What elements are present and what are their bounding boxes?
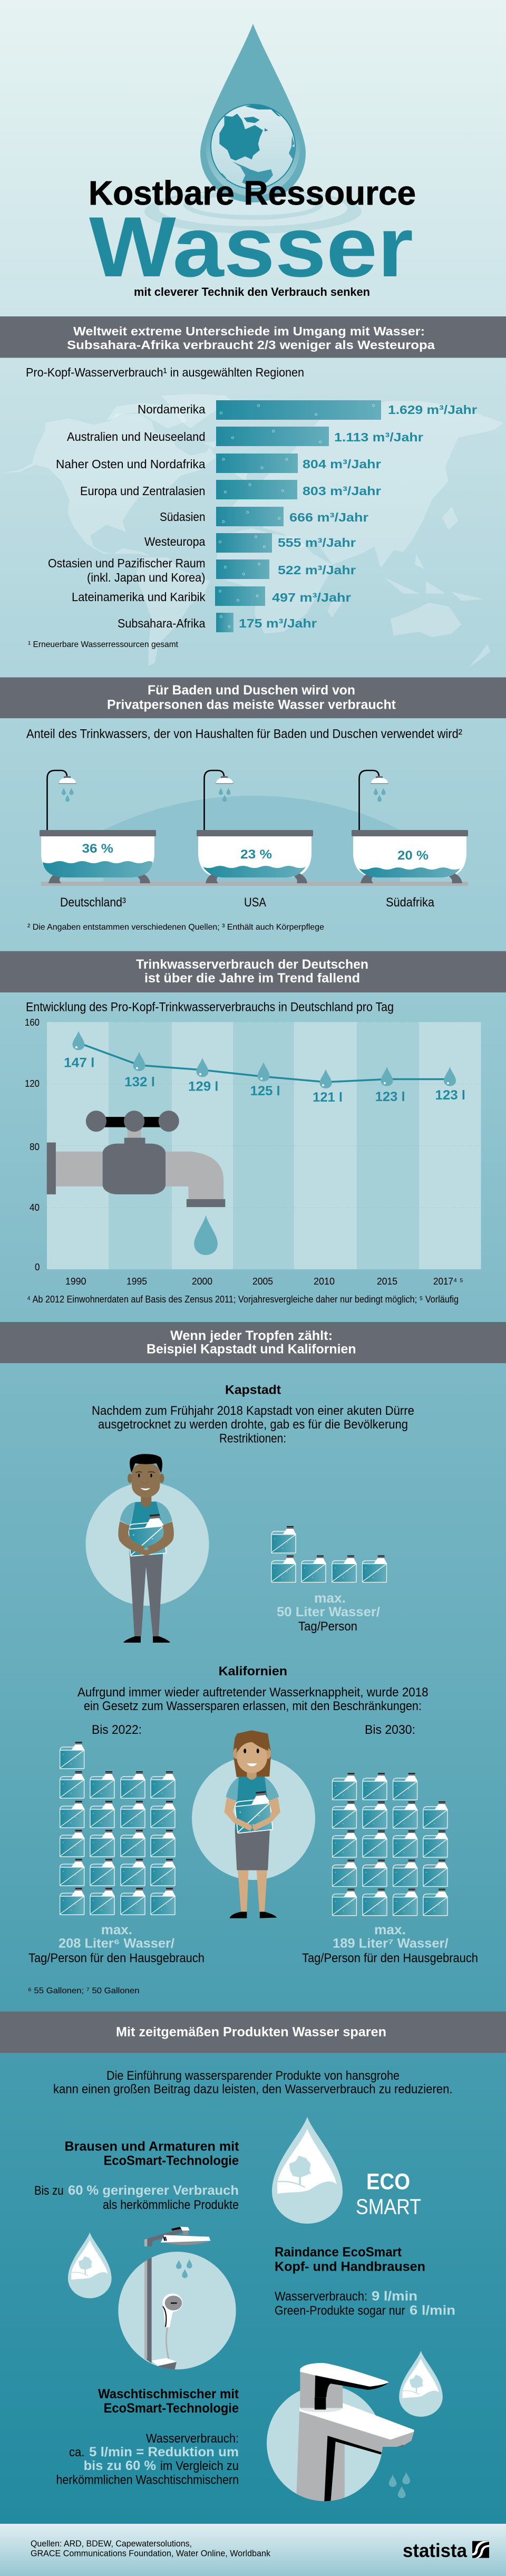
text block: 208 Liter limit: [28, 1922, 205, 1965]
bar: Australien und Neuseeland: [67, 427, 423, 446]
tub: Deutschland 36 %: 36 %: [82, 842, 113, 856]
x axis labels: 2010: [314, 1276, 335, 1287]
y axis labels: 120: [25, 1078, 40, 1089]
text block: Brausen und Armaturen: EcoSmart-Technologie: [104, 2154, 239, 2168]
panel: per capita water use by region: [0, 365, 503, 668]
data values: 121 l: [313, 1090, 343, 1105]
text block: Brausen und Armaturen: Brausen und Armaturen mit: [64, 2139, 239, 2154]
bar: Lateinamerika und Karibik: [72, 586, 351, 606]
data drops: [73, 1031, 456, 1088]
text block: Waschtischmischer: herkömmlichen Waschtischmischern: [56, 2473, 239, 2487]
text block: Kapstadt intro: Restriktionen:: [219, 1431, 286, 1446]
bar: Ostasien und Pazifischer Raum: 522 m³/Jahr: [278, 563, 356, 577]
x axis labels: 2017⁴ ⁵: [433, 1276, 463, 1287]
bar: Ostasien und Pazifischer Raum: Ostasien und Pazifischer Raum: [48, 556, 206, 570]
data line: [79, 1043, 450, 1082]
subtitle: mit cleverer Technik den Verbrauch senken: [134, 285, 370, 298]
tub: USA 23 %: 23 %: [240, 847, 272, 862]
text block: Waschtischmischer: bis zu 60 %: [84, 2458, 156, 2473]
icon: washbasin mixer: [267, 2363, 414, 2502]
icon: third EcoSmart drop: [399, 2351, 443, 2417]
text block: Brausen und Armaturen: [34, 2139, 239, 2212]
heading bar: German consumption trend: [0, 951, 506, 992]
bar: Südasien: Südasien: [160, 510, 206, 524]
text block: Raindance EcoSmart: 6 l/min: [410, 2303, 455, 2318]
country labels: Deutschland³: [60, 895, 126, 910]
heading bar: modern products: Mit zeitgemäßen Produkten Wasser sparen: [116, 2025, 386, 2040]
text block: Waschtischmischer: Waschtischmischer mit: [98, 2387, 239, 2401]
text block: Raindance EcoSmart: 9 l/min: [372, 2289, 417, 2304]
logo text: ECO SMART: SMART: [356, 2195, 421, 2219]
data values: 125 l: [250, 1084, 280, 1098]
text block: products intro: [53, 2069, 452, 2097]
text block: products intro: kann einen großen Beitrag dazu leisten, den Wasserverbrauch zu reduzieren.: [53, 2082, 452, 2097]
icon: 21 water canisters until 2022: [60, 1742, 176, 1915]
tub: Deutschland 36 %: [40, 770, 156, 883]
heading bar: bathing and showering: Privatpersonen das meiste Wasser verbraucht: [107, 697, 396, 712]
heading bar: every drop counts: [0, 1322, 506, 1363]
bar: Westeuropa: Westeuropa: [144, 535, 206, 548]
y axis labels: 160: [25, 1017, 40, 1028]
sources: [31, 2539, 270, 2559]
world map background: [0, 394, 503, 668]
chart columns: [47, 1022, 481, 1269]
bar: Naher Osten und Nordafrika: Naher Osten und Nordafrika: [56, 457, 206, 471]
text block: Raindance EcoSmart: Kopf- und Handbrausen: [275, 2259, 425, 2274]
heading bar: every drop counts: Wenn jeder Tropfen zählt:: [170, 1328, 333, 1343]
heading bar: bathing and showering: [0, 677, 506, 718]
x axis labels: 1995: [126, 1276, 147, 1287]
icon: 19 water canisters until 2030: [332, 1773, 448, 1916]
text block: Waschtischmischer: [56, 2387, 239, 2487]
data values: 123 l: [375, 1089, 405, 1104]
icon: lighter inner band of the drop: [206, 101, 300, 196]
label: Bis 2030: Bis 2030:: [365, 1723, 415, 1737]
data values: 123 l: [435, 1088, 465, 1103]
footnotes 6 and 7: ⁶ 55 Gallonen; ⁷ 50 Gallonen: [28, 1986, 139, 1995]
country labels: USA: [244, 895, 266, 910]
text block: Waschtischmischer: Wasserverbrauch:: [146, 2432, 239, 2446]
panel: bathtub shares: [26, 727, 468, 932]
panel: Kapstadt: [85, 1383, 414, 1643]
country labels: [60, 895, 435, 910]
x axis labels: 2005: [252, 1276, 273, 1287]
footnotes 4 and 5: ⁴ Ab 2012 Einwohnerdaten auf Basis des Zensus 2011; Vorjahresvergleiche daher nur bedingt möglich; ⁵ Vorläufig: [27, 1294, 459, 1305]
bar: Südasien: 666 m³/Jahr: [289, 510, 368, 524]
text block: Waschtischmischer: ca.: [69, 2445, 84, 2459]
text block: Kalifornien intro: Aufrgund immer wieder auftretender Wasserknappheit, wurde 2018: [77, 1685, 429, 1700]
data values: 132 l: [124, 1075, 155, 1089]
heading bar: modern products: [0, 2012, 506, 2053]
icon: ripple rings under the drop: [144, 189, 362, 234]
text block: Kapstadt intro: Nachdem zum Frühjahr 2018 Kapstadt von einer akuten Dürre: [92, 1404, 414, 1418]
y axis labels: 0: [35, 1262, 40, 1272]
text block: 189 Liter limit: max.: [374, 1922, 406, 1937]
heading bar: worldwide differences: Subsahara-Afrika verbraucht 2/3 weniger als Westeuropa: [67, 338, 435, 352]
text block: Waschtischmischer: im Vergleich zu: [160, 2459, 239, 2473]
logo: statista: statista: [403, 2540, 468, 2561]
bar: Australien und Neuseeland: 1.113 m³/Jahr: [334, 430, 423, 444]
bar: Subsahara-Afrika: [118, 613, 317, 632]
x axis labels: 2015: [377, 1276, 397, 1287]
icon: 5 water canisters: [271, 1526, 387, 1582]
bar: Europa und Zentralasien: Europa und Zentralasien: [80, 484, 206, 498]
footnote 1: ¹ Erneuerbare Wasserressourcen gesamt: [28, 640, 179, 649]
bar: Ostasien und Pazifischer Raum: [48, 556, 356, 584]
data values: 129 l: [188, 1079, 218, 1094]
panel: products: [34, 2069, 455, 2502]
bar: Europa und Zentralasien: [80, 480, 381, 499]
subheading: Anteil des Trinkwassers, der von Haushalten für Baden und Duschen verwendet wird²: [26, 727, 462, 741]
footer with sources and logo: [0, 2524, 506, 2576]
data values: [64, 1056, 465, 1105]
icon: woman holding canister: [192, 1730, 315, 1918]
heading bar: bathing and showering: Für Baden und Duschen wird von: [148, 683, 355, 698]
sources: Quellen: ARD, BDEW, Capewatersolutions,: [31, 2539, 192, 2549]
bar: Lateinamerika und Karibik: 497 m³/Jahr: [272, 591, 351, 604]
heading: Kalifornien: Kalifornien: [219, 1664, 287, 1678]
bar: Südasien: [160, 507, 368, 526]
heading: Wasser: Wasser: [89, 199, 413, 295]
bar: Westeuropa: [144, 533, 356, 553]
text block: Raindance EcoSmart: Raindance EcoSmart: [275, 2245, 402, 2260]
subheading: Pro-Kopf-Wasserverbrauch¹ in ausgewählten Regionen: [26, 365, 304, 379]
icon: faucet with drop: [47, 1111, 225, 1255]
tub: Südafrika 20 %: [352, 770, 468, 883]
text block: Kapstadt intro: ausgetrocknet zu werden drohte, gab es für die Bevölkerung: [98, 1417, 408, 1432]
text block: 208 Liter limit: Tag/Person für den Hausgebrauch: [28, 1951, 205, 1965]
text block: Waschtischmischer: 5 l/min = Reduktion um: [89, 2445, 239, 2459]
floor: [41, 882, 468, 886]
x axis labels: [65, 1276, 463, 1287]
bar: Naher Osten und Nordafrika: 804 m³/Jahr: [303, 457, 381, 471]
label: Bis 2022: Bis 2022:: [92, 1723, 142, 1737]
heading: Kostbare Ressource: Kostbare Ressource: [89, 174, 416, 212]
text block: 189 Liter limit: Tag/Person für den Hausgebrauch: [302, 1951, 478, 1965]
logo text: ECO SMART: [356, 2169, 421, 2219]
icon: shower set: [118, 2227, 236, 2369]
panel: Kalifornien: [28, 1664, 478, 1995]
bar: Naher Osten und Nordafrika: [56, 454, 381, 473]
heading bar: worldwide differences: Weltweit extreme Unterschiede im Umgang mit Wasser:: [73, 324, 425, 338]
bar: Nordamerika: Nordamerika: [138, 402, 206, 416]
bar: Lateinamerika und Karibik: Lateinamerika und Karibik: [72, 590, 206, 604]
text block: 50 Liter limit: max.: [314, 1590, 346, 1606]
heading bar: German consumption trend: ist über die Jahre im Trend fallend: [144, 971, 360, 986]
bar: Subsahara-Afrika: Subsahara-Afrika: [118, 616, 206, 630]
title header with water drop and globe: [89, 24, 416, 298]
icon: large EcoSmart drop: [272, 2117, 343, 2224]
tub: Südafrika 20 %: 20 %: [397, 848, 429, 863]
bar: Australien und Neuseeland: Australien und Neuseeland: [67, 430, 206, 443]
sources: GRACE Communications Foundation, Water Online, Worldbank: [31, 2549, 270, 2559]
data values: 147 l: [64, 1056, 95, 1070]
heading bar: every drop counts: Beispiel Kapstadt und Kalifornien: [147, 1342, 356, 1356]
text block: Kalifornien intro: [77, 1685, 429, 1713]
text block: Waschtischmischer: EcoSmart-Technologie: [104, 2401, 239, 2416]
icon: small EcoSmart drop: [68, 2232, 112, 2298]
bar: Ostasien und Pazifischer Raum: (inkl. Japan und Korea): [87, 571, 206, 584]
heading bar: worldwide differences: [0, 316, 506, 358]
text block: 189 Liter limit: [302, 1922, 478, 1965]
text block: Brausen und Armaturen: Bis zu: [34, 2184, 64, 2198]
text block: Raindance EcoSmart: Green-Produkte sogar nur: [275, 2304, 405, 2318]
text block: Raindance EcoSmart: Wasserverbrauch:: [275, 2290, 367, 2304]
heading: Kapstadt: Kapstadt: [225, 1383, 281, 1397]
text block: Kalifornien intro: ein Gesetz zum Wassersparen erlassen, mit den Beschränkungen:: [84, 1699, 422, 1713]
bar: Westeuropa: 555 m³/Jahr: [278, 536, 356, 549]
y axis labels: [25, 1017, 40, 1272]
tub: USA 23 %: [197, 770, 313, 883]
icon: globe: [211, 104, 296, 189]
text block: Raindance EcoSmart: [275, 2245, 455, 2318]
heading bar: German consumption trend: Trinkwasserverbrauch der Deutschen: [136, 957, 368, 972]
panel: line chart per capita drinking water: [25, 1000, 481, 1305]
x axis labels: 1990: [65, 1276, 86, 1287]
background hump behind the tubs: [103, 796, 400, 882]
bar: Nordamerika: 1.629 m³/Jahr: [388, 403, 477, 417]
footnotes 2 and 3: ² Die Angaben entstammen verschiedenen Quellen; ³ Enthält auch Körperpflege: [27, 923, 324, 932]
subheading: Entwicklung des Pro-Kopf-Trinkwasserverbrauchs in Deutschland pro Tag: [26, 1000, 394, 1015]
bar: Subsahara-Afrika: 175 m³/Jahr: [239, 616, 317, 630]
bar: Europa und Zentralasien: 803 m³/Jahr: [303, 484, 381, 498]
text block: Kapstadt intro: [92, 1404, 414, 1446]
bar: Nordamerika: [138, 400, 477, 420]
text block: 208 Liter limit: 208 Liter⁶ Wasser/: [59, 1936, 174, 1951]
text block: 50 Liter limit: Tag/Person: [298, 1619, 357, 1634]
text block: 50 Liter limit: 50 Liter Wasser/: [277, 1605, 380, 1619]
country labels: Südafrika: [386, 895, 435, 910]
text block: Brausen und Armaturen: 60 % geringerer Verbrauch: [68, 2183, 239, 2198]
icon: man holding canister: [85, 1454, 209, 1643]
logo text: ECO SMART: ECO: [366, 2169, 410, 2194]
text block: products intro: Die Einführung wassersparender Produkte von hansgrohe: [106, 2069, 400, 2083]
text block: 189 Liter limit: 189 Liter⁷ Wasser/: [333, 1936, 449, 1951]
text block: 50 Liter limit: [277, 1590, 380, 1634]
text block: 208 Liter limit: max.: [101, 1922, 132, 1937]
y axis labels: 40: [30, 1202, 40, 1213]
text block: Brausen und Armaturen: als herkömmliche Produkte: [103, 2198, 239, 2212]
y axis labels: 80: [30, 1142, 40, 1152]
icon: large water drop: [200, 24, 306, 202]
x axis labels: 2000: [192, 1276, 212, 1287]
